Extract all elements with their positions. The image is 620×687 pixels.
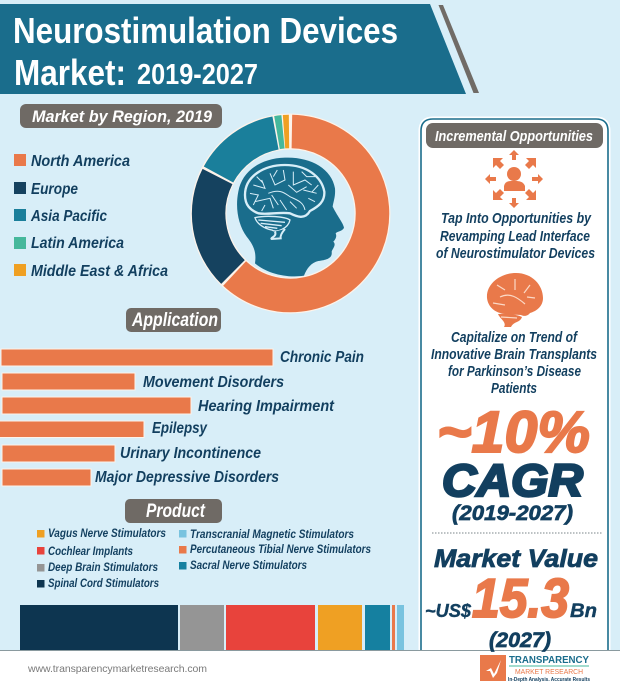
icon: head with brain	[237, 158, 344, 276]
logo: transparency market research: In-Depth Analysis. Accurate Results	[508, 677, 590, 683]
legend: regions: Asia Pacific	[30, 208, 107, 225]
legend: product: Sacral Nerve Stimulators	[190, 560, 307, 572]
stat: cagr: ~10%	[437, 400, 590, 465]
bar chart: application	[0, 349, 364, 486]
stat: market value	[425, 545, 598, 652]
heading: product: Product	[146, 501, 206, 522]
legend: regions: Middle East & Africa	[31, 263, 168, 280]
logo: transparency market research	[480, 654, 590, 683]
title banner: Market:	[14, 52, 126, 93]
heading: application: Application	[131, 310, 218, 331]
stat: market value: Market Value	[434, 545, 598, 573]
heading: incremental opportunities: Incremental Opportunities	[435, 128, 593, 145]
stat: market value: 15.3	[472, 567, 569, 629]
title banner: Neurostimulation Devices	[13, 10, 398, 51]
footer band	[0, 650, 620, 687]
legend: product: Deep Brain Stimulators	[48, 562, 158, 574]
donut chart: market by region	[208, 132, 372, 296]
legend: product: Cochlear Implants	[48, 546, 133, 558]
stacked bar: product	[20, 605, 404, 650]
bar chart: application: Movement Disorders	[143, 374, 284, 391]
legend: regions: North America	[31, 153, 130, 170]
legend: regions: Latin America	[31, 235, 124, 252]
text: brain transplants: Patients	[491, 380, 537, 397]
stat: market value: ~US$	[425, 601, 472, 621]
text: brain transplants: for Parkinson’s Disease	[448, 363, 581, 380]
icon: orange brain	[487, 273, 543, 327]
text: lead interface	[436, 210, 595, 262]
legend: regions	[14, 153, 168, 280]
stat: cagr	[437, 400, 590, 525]
stat: cagr: (2019-2027)	[452, 502, 573, 525]
icon: person with arrows	[485, 150, 543, 208]
stat: market value: (2027)	[489, 629, 551, 652]
text: brain transplants: Capitalize on Trend of	[451, 329, 579, 346]
text: brain transplants	[431, 329, 597, 397]
website url: www.transparencymarketresearch.com	[27, 663, 207, 675]
logo: transparency market research: MARKET RESEARCH	[515, 667, 583, 676]
stat: market value: Bn	[570, 601, 597, 622]
heading: market by region: Market by Region, 2019	[32, 107, 213, 126]
text: lead interface: Tap Into Opportunities by	[441, 210, 592, 227]
bar chart: application: Epilepsy	[152, 420, 208, 437]
bar chart: application: Chronic Pain	[280, 349, 364, 366]
panel: incremental opportunities	[421, 119, 608, 652]
legend: product	[37, 528, 371, 590]
bar chart: application: Urinary Incontinence	[120, 445, 261, 462]
bar chart: application: Major Depressive Disorders	[95, 469, 279, 486]
stat: cagr: CAGR	[442, 455, 584, 506]
bar chart: application: Hearing Impairment	[198, 398, 335, 415]
heading: product	[125, 499, 222, 523]
legend: regions: Europe	[31, 181, 78, 198]
legend: product: Spinal Cord Stimulators	[48, 578, 159, 590]
logo: transparency market research: TRANSPARENCY	[509, 654, 589, 666]
heading: incremental opportunities	[426, 123, 603, 148]
legend: product: Percutaneous Tibial Nerve Stimulators	[190, 544, 371, 556]
title banner	[0, 4, 479, 94]
legend: product: Transcranial Magnetic Stimulators	[190, 529, 354, 541]
title banner: 2019-2027	[137, 59, 258, 91]
legend: product: Vagus Nerve Stimulators	[48, 528, 166, 540]
